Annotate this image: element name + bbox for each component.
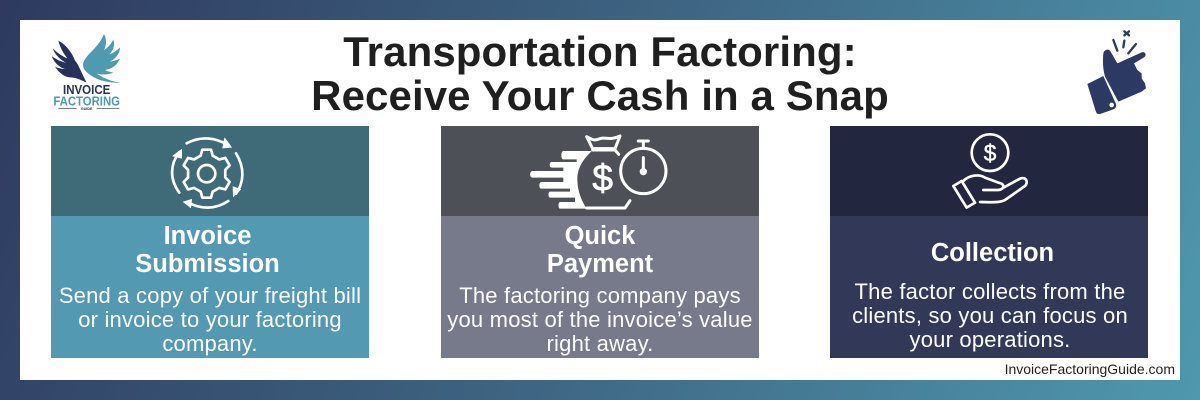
panel: collection [830,126,1148,358]
panel body text [441,216,759,358]
panel: invoice submission [51,126,369,358]
logo: Invoice Factoring Guide: INVOICE [63,83,110,97]
logo: Invoice Factoring Guide: GUIDE [81,107,93,111]
logo: Invoice Factoring Guide [52,34,120,111]
description: Send a copy of your freight bill [59,283,361,308]
description: you most of the invoice’s value [447,307,753,332]
logo: Invoice Factoring Guide: FACTORING [53,94,120,109]
description [59,283,361,356]
heading: Collection [931,239,1054,267]
description: or invoice to your factoring [78,307,342,332]
panel header with money bag and stopwatch icon: $ [592,156,613,198]
panel header with hand and coin icon [830,126,1148,216]
panel header with money bag and stopwatch icon [441,126,759,216]
heading: Invoice [164,222,251,250]
panel body text [51,216,369,358]
panel header with gear icon [51,126,369,216]
title [311,28,889,119]
website credit: InvoiceFactoringGuide.com [1005,361,1175,377]
heading: Submission [135,250,280,278]
description: right away. [547,331,653,356]
description: clients, so you can focus on [852,303,1128,328]
icon: snapping fingers [1087,30,1146,114]
panel: quick payment [441,126,759,358]
heading: Quick [565,222,635,250]
title: Receive Your Cash in a Snap [311,72,889,119]
description: your operations. [910,327,1070,352]
heading [547,222,653,278]
heading: Payment [547,250,653,278]
description [852,279,1128,352]
description: The factor collects from the [855,279,1125,304]
heading [135,222,280,278]
description [447,283,753,356]
description: The factoring company pays [459,283,741,308]
panel body text [830,216,1148,358]
title: Transportation Factoring: [343,28,857,75]
panel header with hand and coin icon: $ [984,140,997,166]
description: company. [162,331,258,356]
